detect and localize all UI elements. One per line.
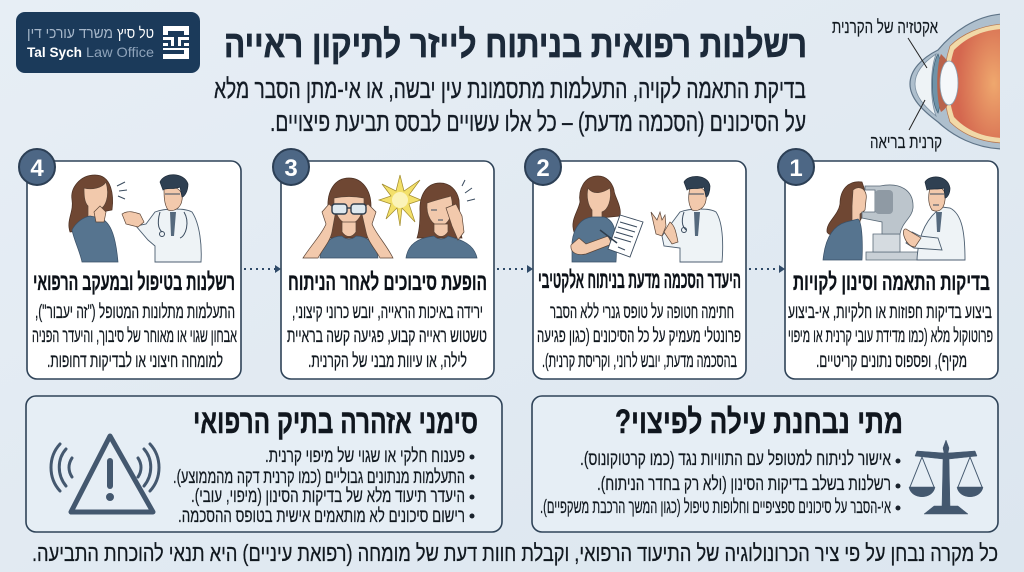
panel: step 3 <box>273 149 494 379</box>
logo Hebrew name: משרד עורכי דין <box>27 25 113 42</box>
bullet list: רשלנות בשלב בדיקות הסינון (ולא רק בחדר הניתוח). <box>597 474 891 495</box>
step number: 2 <box>536 155 550 182</box>
panel: step 1 <box>778 149 998 379</box>
illustration: eye exam <box>823 177 965 260</box>
label: corneal ectasia: אקטזיה של הקרנית <box>832 17 939 37</box>
bullet list: התעלמות מנתונים גבוליים (כמו קרנית דקה מהממוצע). <box>173 467 465 488</box>
eye cross-section <box>910 14 1002 149</box>
label line: ectasia <box>908 38 927 68</box>
logo mark <box>163 26 189 59</box>
panel: step 4 <box>19 149 241 379</box>
intro text: בדיקת התאמה לקויה, התעלמות מתסמונת עין יבשה, או אי-מתן הסבר מלא <box>214 74 806 104</box>
illustration: consent form <box>571 176 723 262</box>
step number <box>19 149 55 185</box>
arrow: card 3 to 2 <box>497 265 533 273</box>
heading: הופעת סיבוכים לאחר הניתוח <box>288 269 487 296</box>
bullet list: פענוח חלקי או שגוי של מיפוי קרנית. <box>265 446 465 467</box>
step number: 4 <box>30 155 44 182</box>
icon: scales of justice <box>909 440 983 514</box>
label: healthy cornea: קרנית בריאה <box>870 132 942 152</box>
bullet list: אישור לניתוח למטופל עם התוויות נגד (כמו קרטוקונוס). <box>580 449 891 470</box>
step number <box>273 149 309 185</box>
body: לילה, או עיוות מבני של הקרנית. <box>308 351 467 372</box>
heading: היעדר הסכמה מדעת בניתוח אלקטיבי <box>538 267 741 294</box>
panel: warning signs <box>26 396 502 532</box>
body <box>32 302 237 372</box>
body <box>287 302 487 372</box>
arrow: card 2 to 1 <box>749 265 785 273</box>
eye diagram <box>832 14 1002 152</box>
bullet list <box>540 449 900 518</box>
body: ירידה באיכות הראייה, יובש כרוני קיצוני, <box>292 302 483 323</box>
title: רשלנות רפואית בניתוח לייזר לתיקון ראייה <box>224 24 807 66</box>
body: למומחה חיצוני או לבדיקות דחופות. <box>47 351 223 372</box>
body: בהסכמה מדעת, יובש לרוני, וקריסת קרנית). <box>542 351 737 372</box>
step number <box>525 149 561 185</box>
illustration: dismissed complaint <box>69 175 201 262</box>
body: אבחון שגוי או מאוחר של סיבוך, והיעדר הפניה <box>32 326 237 347</box>
heading: סימני אזהרה בתיק הרפואי <box>193 403 478 441</box>
step number: 1 <box>789 155 803 182</box>
panel: when is there a claim <box>532 396 998 532</box>
bullet list <box>173 446 474 527</box>
panel: step 2 <box>525 149 746 379</box>
label line: healthy cornea <box>909 100 925 130</box>
bullet list: רישום סיכונים לא מותאמים אישית בטופס ההסכמה. <box>178 506 465 527</box>
icon: warning triangle <box>51 436 159 512</box>
body: טשטוש ראייה קבוע, פגיעה קשה בראיית <box>287 326 487 347</box>
intro text: על הסיכונים (הסכמה מדעת) – כל אלו עשויים לבסס תביעת פיצויים. <box>270 107 806 137</box>
heading: מתי נבחנת עילה לפיצוי? <box>615 403 903 441</box>
logo Latin name <box>27 44 154 60</box>
body: חתימה חטופה על טופס גנרי ללא הסבר <box>550 302 734 323</box>
body: פרונטלי מעמיק על כל הסיכונים (כגון פגיעה <box>537 326 741 347</box>
bullet list: היעדר תיעוד מלא של בדיקות הסינון (מיפוי, עובי). <box>191 486 465 507</box>
logo: Tal Sych Law Office <box>16 12 200 73</box>
body <box>788 302 993 372</box>
logo Latin name: Tal Sych <box>27 44 82 60</box>
logo Latin name: Law Office <box>86 44 154 60</box>
body: התעלמות מתלונות המטופל ("זה יעבור"), <box>35 302 235 323</box>
logo Hebrew name: טל סיץ <box>117 25 154 42</box>
step number <box>778 149 814 185</box>
arrow: card 4 to 3 <box>244 265 281 273</box>
body <box>537 302 741 372</box>
step number: 3 <box>284 155 298 182</box>
heading: רשלנות בטיפול ובמעקב הרפואי <box>33 269 235 296</box>
illustration: complications <box>303 175 477 258</box>
intro text <box>214 74 806 137</box>
